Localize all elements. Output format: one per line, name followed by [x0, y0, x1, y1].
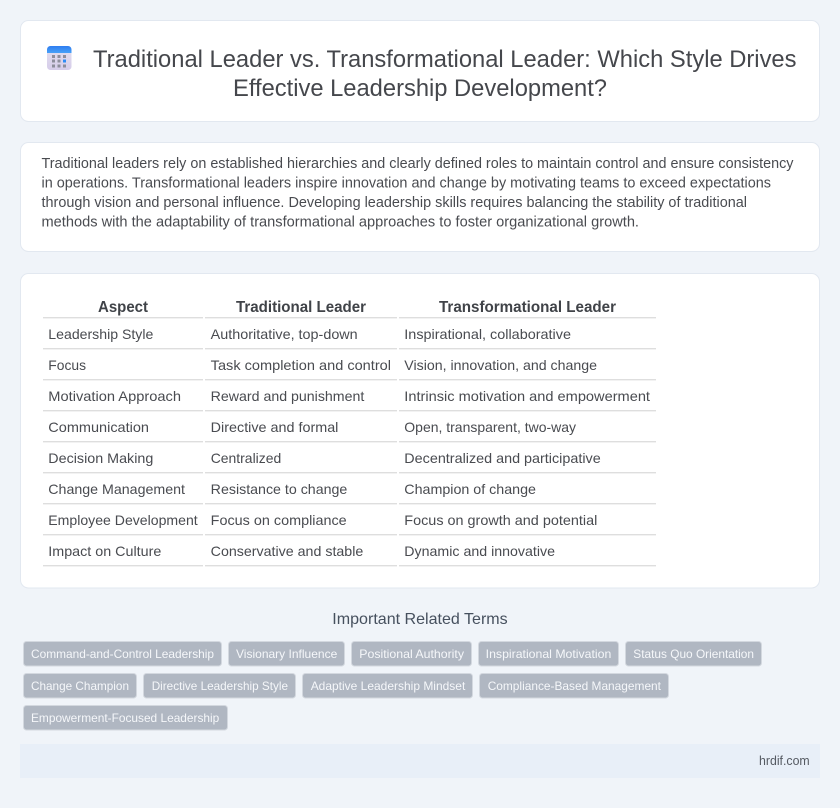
row: communication: Directive and formal	[211, 419, 338, 435]
tag: positional authority	[352, 642, 472, 666]
row: impact on culture: Conservative and stable	[211, 543, 364, 559]
text block: introduction: in operations. Transformational leaders inspire innovation and change by motivating teams to exceed expectations	[42, 174, 771, 192]
row: decision making: Centralized	[211, 450, 281, 466]
table header row: Traditional Leader	[236, 299, 366, 316]
row: change management: Change Management	[48, 481, 185, 497]
panel: comparison table	[20, 274, 820, 588]
row: change management: Resistance to change	[211, 481, 348, 497]
table header row: Transformational Leader	[439, 299, 616, 316]
row: impact on culture	[48, 543, 555, 559]
footer: hrdif.com	[759, 754, 810, 768]
row: motivation approach: Motivation Approach	[48, 388, 181, 404]
row: leadership style: Leadership Style	[48, 326, 154, 342]
table header row: Aspect	[98, 299, 149, 316]
tag: command-and-control leadership: Command-and-Control Leadership	[31, 647, 214, 661]
table grid lines	[43, 317, 656, 566]
row: decision making: Decision Making	[48, 450, 153, 466]
row: employee development	[48, 512, 597, 528]
tag: visionary influence	[228, 642, 344, 666]
row: focus: Focus	[48, 357, 86, 373]
tag: change champion: Change Champion	[31, 679, 129, 693]
tag: compliance-based management	[480, 674, 668, 698]
tag: adaptive leadership mindset: Adaptive Leadership Mindset	[311, 679, 466, 693]
row: focus: Task completion and control	[211, 357, 391, 373]
row: impact on culture: Dynamic and innovative	[404, 543, 555, 559]
tag: directive leadership style: Directive Leadership Style	[152, 679, 288, 693]
row: employee development: Focus on growth and potential	[404, 512, 597, 528]
tag: adaptive leadership mindset	[302, 674, 472, 698]
row: leadership style: Authoritative, top-down	[211, 326, 358, 342]
tag: inspirational motivation	[478, 642, 618, 666]
footer	[20, 744, 820, 778]
tags: related terms	[24, 642, 762, 730]
table header row	[98, 299, 616, 316]
row: decision making	[48, 450, 601, 466]
tag: empowerment-focused leadership	[24, 706, 228, 730]
tag: command-and-control leadership	[24, 642, 222, 666]
row: motivation approach	[48, 388, 650, 404]
row: focus	[48, 357, 597, 373]
row: change management	[48, 481, 536, 497]
tag: change champion	[24, 674, 136, 698]
row: leadership style: Inspirational, collaborative	[404, 326, 571, 342]
row: communication	[48, 419, 576, 435]
title: Traditional Leader vs. Transformational Leader: Which Style Drives	[93, 46, 796, 73]
tag: empowerment-focused leadership: Empowerment-Focused Leadership	[31, 711, 220, 725]
tag: positional authority: Positional Authority	[359, 647, 464, 661]
row: leadership style	[48, 326, 571, 342]
title	[93, 46, 796, 102]
tag: visionary influence: Visionary Influence	[236, 647, 338, 661]
row: decision making: Decentralized and participative	[404, 450, 601, 466]
text block: introduction: methods with the adaptability of transformational approaches to foster organizational growth.	[42, 214, 639, 230]
tag: status quo orientation	[626, 642, 762, 666]
panel: header	[20, 20, 820, 122]
title: Effective Leadership Development?	[233, 75, 607, 102]
row: communication: Communication	[48, 419, 149, 435]
heading: important related terms: Important Related Terms	[332, 611, 508, 628]
text block: introduction: Traditional leaders rely on established hierarchies and clearly defined roles to maintain control and ensure consistency	[42, 155, 794, 172]
row: impact on culture: Impact on Culture	[48, 543, 162, 559]
row: motivation approach: Reward and punishment	[211, 388, 364, 404]
tag: compliance-based management: Compliance-Based Management	[488, 679, 662, 693]
tag: directive leadership style	[144, 674, 296, 698]
text block: introduction: through vision and personal influence. Developing leadership skills requires balancing the stability of traditional	[42, 194, 747, 211]
tag: inspirational motivation: Inspirational Motivation	[486, 647, 611, 661]
row: employee development: Employee Development	[48, 512, 198, 528]
text block: introduction	[42, 155, 794, 230]
tag: status quo orientation: Status Quo Orientation	[633, 647, 754, 661]
row: communication: Open, transparent, two-way	[404, 419, 576, 435]
row: focus: Vision, innovation, and change	[404, 357, 597, 373]
row: motivation approach: Intrinsic motivation and empowerment	[404, 388, 650, 404]
row: change management: Champion of change	[404, 481, 536, 497]
row: employee development: Focus on compliance	[211, 512, 347, 528]
panel: introduction	[20, 142, 820, 252]
icon: calendar	[47, 46, 72, 70]
